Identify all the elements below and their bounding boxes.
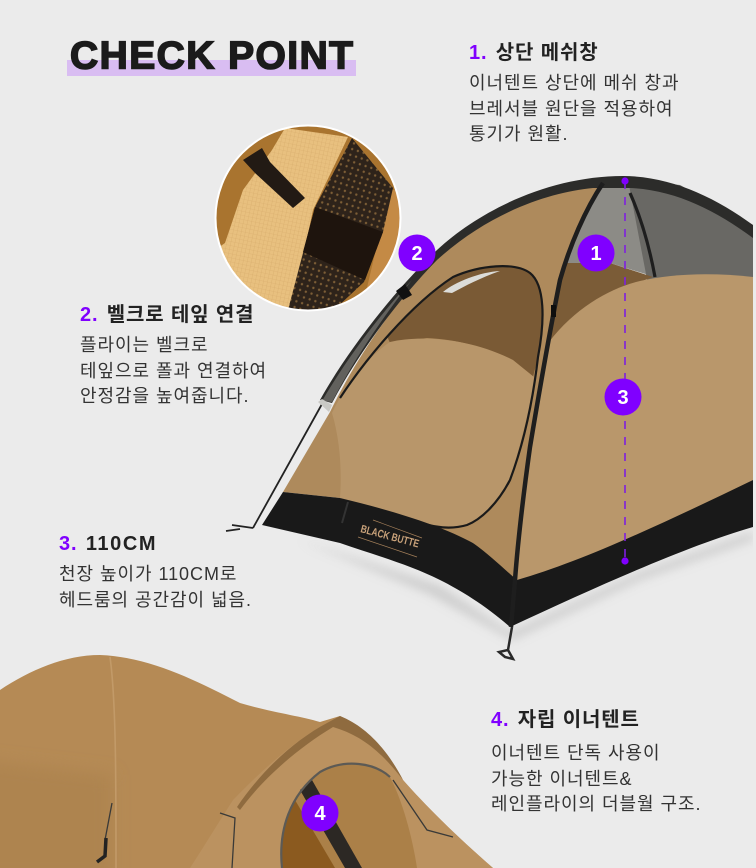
pole sleeve mark <box>551 305 556 317</box>
tent body left panel <box>283 184 600 584</box>
vestibule edge <box>237 716 403 810</box>
fly shading <box>0 760 112 868</box>
main pole <box>511 183 603 627</box>
body 2: 테잎으로 폴과 연결하여 <box>80 360 267 380</box>
band strap mark <box>396 284 412 300</box>
brand label <box>358 520 422 557</box>
text block 3 <box>59 533 252 610</box>
silver tag <box>318 399 332 412</box>
title highlight bar <box>67 60 356 76</box>
tent body right panel <box>513 274 753 583</box>
window light sliver <box>443 271 500 293</box>
text block 4 <box>491 709 701 814</box>
fly body <box>0 655 493 868</box>
dashed line <box>624 181 626 561</box>
guy line and stake left <box>226 404 322 531</box>
title: CHECK POINT <box>70 34 353 78</box>
body 2: 안정감을 높여줍니다. <box>80 386 250 406</box>
photo ring <box>216 126 400 310</box>
right pole <box>630 193 655 277</box>
marker 1 <box>578 234 614 272</box>
heading 4: 4. 자립 이너텐트 <box>491 709 640 731</box>
heading 2: 2. 벨크로 테잎 연결 <box>80 304 254 326</box>
body 2: 플라이는 벨크로 <box>80 335 209 355</box>
lower tent <box>0 655 493 868</box>
door zip outline <box>340 266 543 528</box>
body 4: 이너텐트 단독 사용이 <box>491 743 660 763</box>
marker 3: 3 <box>617 387 629 409</box>
text block 2 <box>80 304 267 406</box>
marker 4: 4 <box>314 803 326 825</box>
marker 2: 2 <box>411 243 423 265</box>
door dark interior <box>282 800 335 868</box>
text block 1 <box>469 42 679 144</box>
bottom black skirt <box>262 480 753 627</box>
height measure line <box>621 177 629 565</box>
body 4: 가능한 이너텐트& <box>491 768 632 788</box>
heading 3: 3. 110CM <box>59 533 157 555</box>
marker 4 <box>302 794 338 832</box>
dot bottom <box>621 557 629 565</box>
heading 1: 1. 상단 메쉬창 <box>469 42 598 64</box>
band lighter mesh <box>322 280 412 402</box>
marker 2 <box>398 234 436 272</box>
zip pull <box>342 502 348 523</box>
door window <box>387 266 543 377</box>
inner pole strip <box>300 780 362 868</box>
door rolled flap <box>332 339 534 528</box>
toggle <box>97 838 106 862</box>
inner brown <box>550 263 653 340</box>
photo content <box>215 125 402 311</box>
body 1: 통기가 원활. <box>469 124 568 144</box>
body 1: 브레서블 원단을 적용하여 <box>469 98 674 118</box>
label text: BLACK BUTTE <box>359 523 420 550</box>
door zip <box>281 764 390 868</box>
vestibule <box>190 718 493 868</box>
roof mesh band <box>320 176 753 403</box>
main tent <box>226 176 753 659</box>
inner mesh dark right <box>630 184 753 280</box>
body 4: 레인플라이의 더블월 구조. <box>491 794 701 814</box>
marker 1: 1 <box>590 243 602 265</box>
body 4 <box>491 743 701 814</box>
body 1 <box>469 73 679 144</box>
guy cords <box>105 780 453 868</box>
ground shadow <box>300 532 753 640</box>
bottom stake <box>499 627 513 659</box>
body 1: 이너텐트 상단에 메쉬 창과 <box>469 73 679 93</box>
door opening <box>281 764 417 868</box>
body 3: 천장 높이가 110CM로 <box>59 564 237 584</box>
marker 3 <box>604 378 642 416</box>
body 3 <box>59 564 252 610</box>
dot top <box>621 177 629 185</box>
body 3: 헤드룸의 공간감이 넓음. <box>59 590 252 610</box>
seam <box>110 657 116 868</box>
detail photo circle <box>215 125 402 311</box>
body 2 <box>80 335 267 406</box>
inner mesh grey left <box>568 188 646 274</box>
